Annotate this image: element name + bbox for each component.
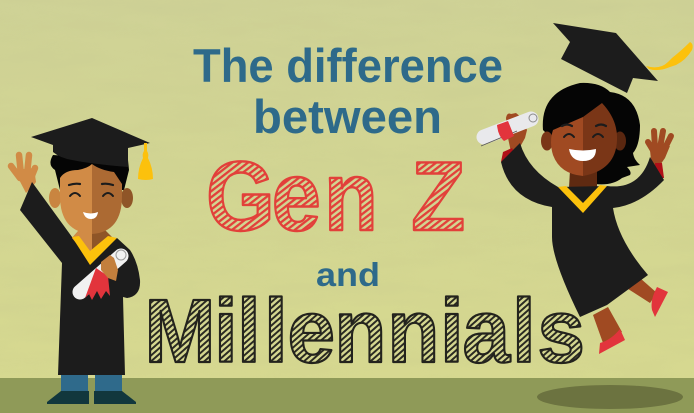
flying mortarboard cap xyxy=(553,23,658,93)
red ribbon xyxy=(85,268,110,300)
gown xyxy=(501,143,664,317)
raised right hand xyxy=(648,131,671,170)
shadow under jumping graduate xyxy=(537,385,683,409)
scroll band xyxy=(497,121,514,141)
title: The difference between: The difference xyxy=(193,39,503,92)
word: and: and xyxy=(316,256,380,293)
icon: raised hand xyxy=(11,155,36,193)
shoes xyxy=(47,391,136,404)
mortarboard cap xyxy=(31,118,150,167)
trousers xyxy=(61,372,122,391)
hand holding scroll xyxy=(506,113,527,152)
ground strip xyxy=(0,378,694,413)
tassel xyxy=(138,143,153,180)
legs xyxy=(593,278,657,343)
collar xyxy=(558,185,607,213)
hair xyxy=(543,83,640,184)
heading: Millennials: Millennials xyxy=(144,281,585,381)
ears xyxy=(541,132,626,150)
hand holding scroll xyxy=(101,255,118,281)
graduate: woman jumping xyxy=(481,23,693,354)
cap tassel xyxy=(646,42,693,70)
red shoes xyxy=(599,287,668,354)
diploma scroll xyxy=(80,250,126,292)
facial features xyxy=(69,184,113,219)
face xyxy=(60,164,122,234)
heading: Gen Z: Gen Z xyxy=(206,142,465,251)
red cuffs xyxy=(501,148,664,178)
neck xyxy=(72,230,113,262)
neck xyxy=(569,170,597,205)
face xyxy=(551,103,617,176)
gown xyxy=(20,182,140,375)
diploma scroll xyxy=(481,114,537,146)
collar xyxy=(72,236,117,265)
ears xyxy=(49,188,133,208)
title: The difference between: between xyxy=(253,90,442,143)
title: The difference between xyxy=(193,39,503,143)
facial features xyxy=(562,124,606,161)
hair xyxy=(50,155,129,190)
graduate: man waving xyxy=(11,118,153,404)
